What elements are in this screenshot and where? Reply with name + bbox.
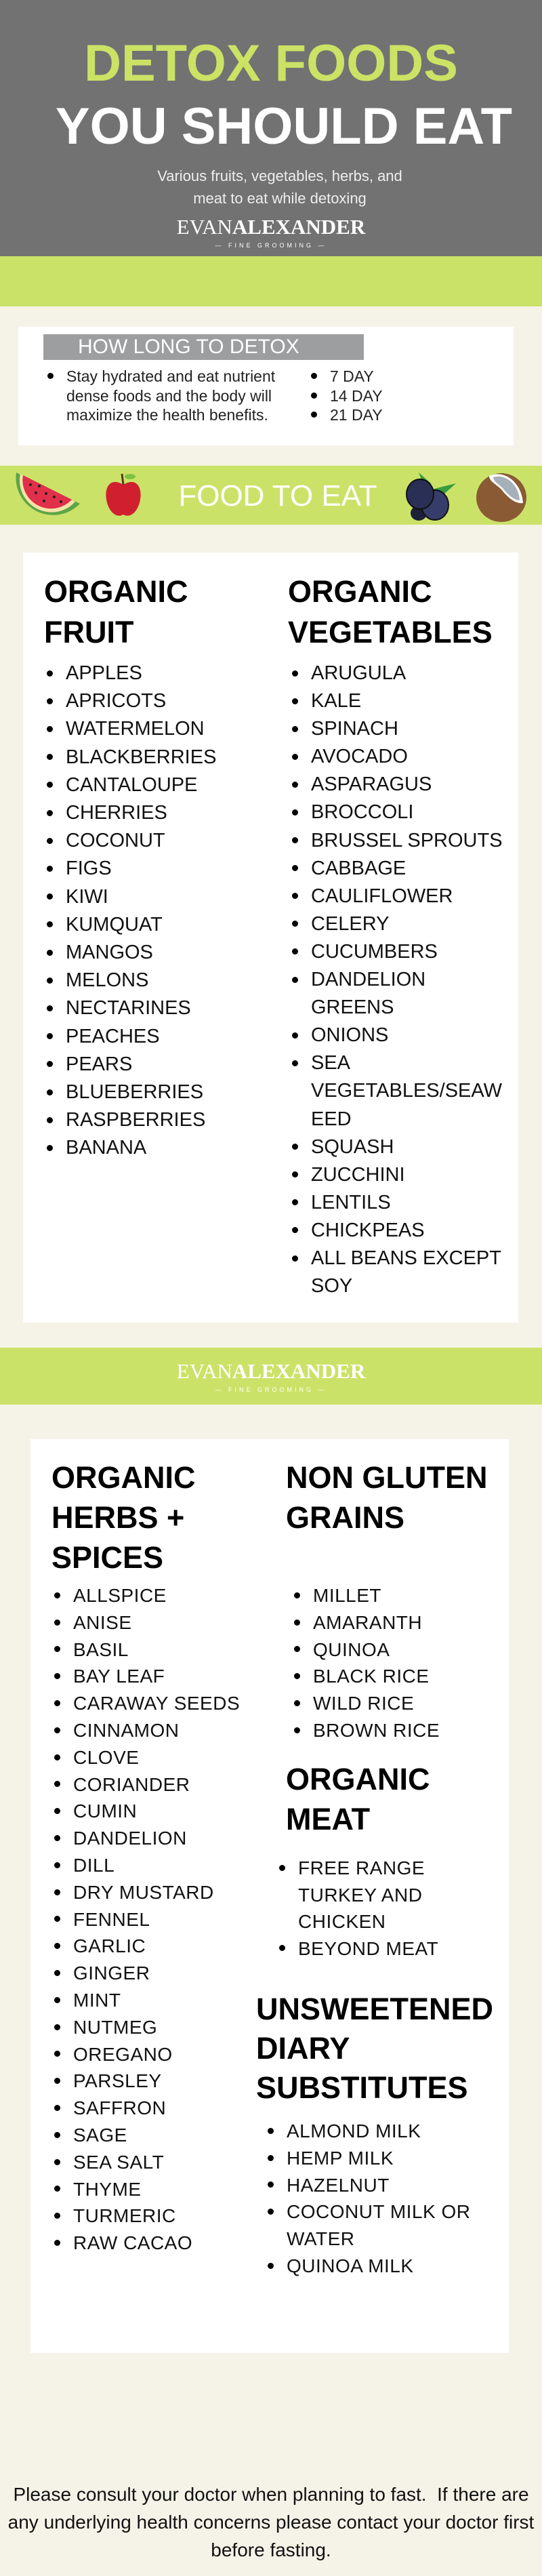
list: dairy substitutes: QUINOA MILK: [287, 2255, 414, 2276]
logo: EVANALEXANDER: [177, 1359, 365, 1383]
logo: [177, 1359, 366, 1393]
title line 2: YOU SHOULD EAT: [56, 98, 512, 155]
list: dairy substitutes: COCONUT MILK OR: [287, 2201, 470, 2222]
list: fruit: BLUEBERRIES: [66, 1081, 203, 1103]
list: fruit: PEACHES: [66, 1026, 160, 1047]
list: fruit: RASPBERRIES: [66, 1109, 205, 1131]
list: herbs: [54, 1585, 240, 2253]
list: meat: [279, 1857, 438, 1959]
list: fruit: MANGOS: [66, 942, 153, 963]
list: vegetables: ARUGULA: [311, 662, 406, 684]
list: fruit: BLACKBERRIES: [66, 746, 216, 768]
list: fruit: [47, 662, 216, 1159]
list: meat: BEYOND MEAT: [298, 1937, 438, 1959]
durations: [311, 367, 383, 424]
list: herbs: FENNEL: [73, 1909, 150, 1930]
icon: watermelon: [16, 472, 80, 515]
heading: dairy substitutes: UNSWEETENED: [256, 1992, 493, 2026]
list: fruit: KIWI: [66, 886, 108, 908]
list: herbs: ANISE: [73, 1612, 132, 1633]
heading: herbs + spices: SPICES: [51, 1540, 163, 1575]
panel: fruit and vegetables: [23, 552, 518, 1323]
list: grains: BROWN RICE: [313, 1720, 440, 1741]
footer disclaimer: [8, 2484, 534, 2560]
list: vegetables: DANDELION: [311, 969, 425, 990]
list: herbs: GINGER: [73, 1963, 150, 1984]
bullet text: dense foods and the body will: [66, 386, 272, 404]
green band: [0, 256, 542, 306]
list: herbs: DILL: [73, 1855, 114, 1876]
heading: dairy substitutes: DIARY: [256, 2031, 350, 2066]
list: herbs: ALLSPICE: [73, 1585, 167, 1606]
list: vegetables: VEGETABLES/SEAW: [311, 1080, 502, 1102]
list: fruit: PEARS: [66, 1053, 132, 1075]
heading: organic vegetables: [288, 574, 493, 649]
list: meat: CHICKEN: [298, 1911, 386, 1932]
list: vegetables: SQUASH: [311, 1136, 394, 1158]
list: dairy substitutes: WATER: [287, 2228, 355, 2249]
list: dairy substitutes: [268, 2120, 470, 2276]
list: vegetables: AVOCADO: [311, 746, 408, 767]
footer disclaimer: Please consult your doctor when planning to fast. If there are: [13, 2484, 529, 2505]
header panel: [0, 0, 542, 256]
list: meat: FREE RANGE: [298, 1857, 425, 1878]
list: herbs: SAGE: [73, 2125, 127, 2146]
bullet text: maximize the health benefits.: [66, 406, 268, 424]
list: herbs: SEA SALT: [73, 2152, 164, 2173]
list: herbs: CORIANDER: [73, 1774, 190, 1795]
list: vegetables: CHICKPEAS: [311, 1220, 425, 1241]
footer disclaimer: before fasting.: [211, 2539, 331, 2560]
list: herbs: TURMERIC: [73, 2205, 176, 2226]
bullet text: [47, 367, 275, 424]
heading: herbs + spices: ORGANIC: [51, 1460, 195, 1495]
list: herbs: DANDELION: [73, 1828, 187, 1849]
list: vegetables: CUCUMBERS: [311, 941, 438, 963]
heading: organic vegetables: ORGANIC: [288, 574, 432, 609]
heading: non gluten grains: [286, 1460, 488, 1535]
list: herbs: NUTMEG: [73, 2017, 157, 2038]
footer disclaimer: any underlying health concerns please contact your doctor first: [8, 2512, 534, 2533]
heading: organic meat: [286, 1762, 430, 1836]
list: fruit: CHERRIES: [66, 802, 167, 824]
list: vegetables: CELERY: [311, 913, 390, 935]
durations: 14 DAY: [330, 386, 383, 404]
panel: how long to detox: [18, 327, 514, 445]
list: herbs: THYME: [73, 2179, 141, 2200]
title line 1: DETOX FOODS: [84, 35, 458, 92]
list: dairy substitutes: ALMOND MILK: [287, 2120, 421, 2141]
list: vegetables: [292, 662, 503, 1297]
list: vegetables: ZUCCHINI: [311, 1164, 405, 1186]
icon: blueberries: [406, 472, 456, 521]
list: herbs: PARSLEY: [73, 2070, 162, 2091]
list: herbs: MINT: [73, 1990, 121, 2011]
heading: non gluten grains: NON GLUTEN: [286, 1460, 488, 1495]
list: herbs: BAY LEAF: [73, 1666, 165, 1687]
list: grains: WILD RICE: [313, 1693, 414, 1714]
list: herbs: BASIL: [73, 1639, 129, 1660]
list: vegetables: SEA: [311, 1052, 350, 1074]
list: grains: [294, 1585, 440, 1741]
logo: EVANALEXANDER: [177, 215, 365, 239]
subtitle: meat to eat while detoxing: [193, 190, 367, 207]
list: fruit: FIGS: [66, 858, 112, 879]
list: vegetables: BROCCOLI: [311, 801, 413, 823]
list: vegetables: CAULIFLOWER: [311, 885, 453, 907]
list: vegetables: KALE: [311, 690, 361, 712]
list: fruit: COCONUT: [66, 830, 165, 851]
heading: organic fruit: FRUIT: [44, 615, 133, 649]
list: herbs: OREGANO: [73, 2044, 173, 2065]
logo: [177, 215, 366, 249]
list: herbs: SAFFRON: [73, 2097, 166, 2118]
heading: organic meat: MEAT: [286, 1802, 370, 1836]
list: herbs: CINNAMON: [73, 1720, 179, 1741]
heading: organic meat: ORGANIC: [286, 1762, 430, 1796]
list: vegetables: EED: [311, 1108, 352, 1129]
list: herbs: CUMIN: [73, 1800, 137, 1822]
heading bar: [43, 334, 364, 360]
list: vegetables: GREENS: [311, 997, 394, 1018]
list: fruit: APPLES: [66, 662, 142, 684]
list: herbs: CARAWAY SEEDS: [73, 1693, 240, 1714]
list: vegetables: ASPARAGUS: [311, 773, 432, 795]
list: grains: QUINOA: [313, 1639, 390, 1660]
list: vegetables: ONIONS: [311, 1024, 388, 1046]
list: fruit: KUMQUAT: [66, 914, 163, 935]
list: fruit: BANANA: [66, 1137, 146, 1159]
list: fruit: WATERMELON: [66, 718, 205, 740]
list: vegetables: CABBAGE: [311, 858, 406, 879]
list: dairy substitutes: HEMP MILK: [287, 2148, 394, 2169]
banner: food to eat: [0, 466, 542, 525]
durations: 7 DAY: [330, 367, 374, 385]
list: herbs: RAW CACAO: [73, 2232, 192, 2253]
list: grains: BLACK RICE: [313, 1666, 430, 1687]
list: herbs: DRY MUSTARD: [73, 1882, 214, 1903]
heading: dairy substitutes: [256, 1992, 493, 2105]
panel: herbs, grains, meat, dairy: [30, 1439, 509, 2353]
icon: coconut: [476, 473, 526, 522]
list: fruit: APRICOTS: [66, 690, 166, 712]
list: vegetables: LENTILS: [311, 1192, 391, 1213]
list: herbs: CLOVE: [73, 1747, 139, 1768]
heading: herbs + spices: HERBS +: [51, 1500, 184, 1535]
list: vegetables: BRUSSEL SPROUTS: [311, 830, 503, 851]
banner text: FOOD TO EAT: [178, 479, 377, 512]
list: vegetables: ALL BEANS EXCEPT: [311, 1247, 501, 1269]
subtitle: Various fruits, vegetables, herbs, and: [157, 167, 402, 184]
list: meat: TURKEY AND: [298, 1885, 422, 1905]
subtitle: [157, 167, 402, 207]
list: dairy substitutes: HAZELNUT: [287, 2175, 390, 2196]
logo: — FINE GROOMING —: [215, 1386, 327, 1393]
list: grains: MILLET: [313, 1585, 381, 1606]
list: fruit: MELONS: [66, 969, 148, 991]
list: herbs: GARLIC: [73, 1935, 146, 1956]
heading: dairy substitutes: SUBSTITUTES: [256, 2070, 468, 2105]
heading: herbs + spices: [51, 1460, 195, 1575]
bullet text: Stay hydrated and eat nutrient: [66, 367, 275, 385]
heading: non gluten grains: GRAINS: [286, 1500, 404, 1535]
green band with logo: [0, 1348, 542, 1405]
list: grains: AMARANTH: [313, 1612, 422, 1633]
durations: 21 DAY: [330, 406, 383, 424]
list: vegetables: SPINACH: [311, 718, 398, 740]
heading: organic fruit: ORGANIC: [44, 574, 188, 609]
list: vegetables: SOY: [311, 1275, 352, 1297]
heading: organic vegetables: VEGETABLES: [288, 615, 493, 649]
list: fruit: NECTARINES: [66, 997, 191, 1019]
heading bar: HOW LONG TO DETOX: [78, 336, 299, 358]
logo: — FINE GROOMING —: [215, 242, 327, 249]
heading: organic fruit: [44, 574, 188, 649]
list: fruit: CANTALOUPE: [66, 774, 197, 796]
icon: apple: [106, 473, 141, 516]
